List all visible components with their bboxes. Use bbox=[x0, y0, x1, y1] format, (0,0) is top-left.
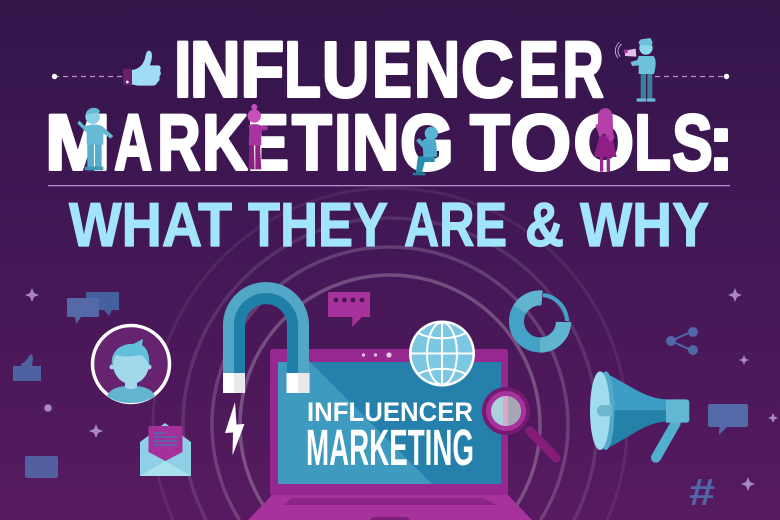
subtitle: THEY bbox=[248, 191, 388, 260]
title: R bbox=[562, 26, 604, 114]
icon: share bbox=[666, 328, 698, 354]
title: R bbox=[157, 98, 201, 186]
icon: speech bubble with dots bbox=[328, 292, 370, 327]
laptop screen text: INFLUENCER bbox=[307, 397, 473, 427]
icon: magnifying glass bbox=[482, 387, 556, 458]
title: E bbox=[247, 98, 289, 186]
icon: hashtag: # bbox=[689, 472, 715, 514]
icon: donut chart bbox=[517, 295, 567, 345]
title: L bbox=[284, 26, 321, 114]
title: T bbox=[470, 98, 510, 186]
concentric signal rings bbox=[153, 188, 627, 520]
title: I bbox=[174, 26, 191, 114]
title: G bbox=[400, 98, 454, 186]
title: L bbox=[634, 98, 671, 186]
subtitle: & bbox=[525, 191, 564, 260]
title: N bbox=[190, 26, 241, 114]
decorative stars bbox=[25, 288, 778, 491]
subtitle bbox=[69, 191, 709, 260]
figure: woman in magenta bbox=[248, 104, 268, 169]
icon: faded thumbs up bbox=[13, 355, 41, 381]
title: T bbox=[292, 98, 332, 186]
title: : bbox=[708, 98, 734, 186]
laptop screen text bbox=[306, 397, 474, 476]
title: E bbox=[518, 26, 559, 114]
title: S bbox=[672, 98, 713, 186]
title bbox=[45, 26, 734, 186]
icon: megaphone bbox=[590, 371, 689, 458]
icon: horseshoe magnet bbox=[223, 293, 310, 393]
icon: open envelope bbox=[140, 423, 191, 476]
figure: seated person with device bbox=[413, 127, 438, 175]
icon: faded envelope bbox=[25, 456, 58, 478]
title: I bbox=[334, 98, 351, 186]
title: C bbox=[461, 26, 514, 114]
laptop bbox=[248, 349, 532, 520]
title: M bbox=[45, 98, 110, 186]
icon: faded speech bubble bbox=[708, 404, 748, 435]
title: A bbox=[114, 98, 152, 186]
figure: man with megaphone bbox=[615, 38, 656, 102]
title: E bbox=[372, 26, 412, 114]
avatar icon bbox=[92, 326, 170, 403]
subtitle: WHY bbox=[580, 191, 709, 260]
title: U bbox=[322, 26, 369, 114]
dashed line left bbox=[52, 74, 122, 79]
title: N bbox=[414, 26, 460, 114]
title: K bbox=[202, 98, 248, 186]
title: O bbox=[573, 98, 634, 186]
icon: lightning bolt bbox=[225, 402, 244, 456]
dashed line right bbox=[655, 74, 729, 79]
subtitle: ARE bbox=[404, 191, 507, 260]
figure: woman in dress bbox=[594, 108, 617, 172]
title: F bbox=[240, 26, 284, 114]
subtitle: WHAT bbox=[69, 191, 232, 260]
title: N bbox=[352, 98, 399, 186]
icon: thumbs up bbox=[123, 51, 161, 86]
icon: globe bbox=[409, 320, 475, 386]
icon: chat bubbles bbox=[67, 292, 119, 324]
title: O bbox=[510, 98, 571, 186]
divider line bbox=[48, 185, 730, 186]
figure: man with thumbs up bbox=[77, 108, 113, 170]
laptop screen text: MARKETING bbox=[306, 419, 474, 476]
